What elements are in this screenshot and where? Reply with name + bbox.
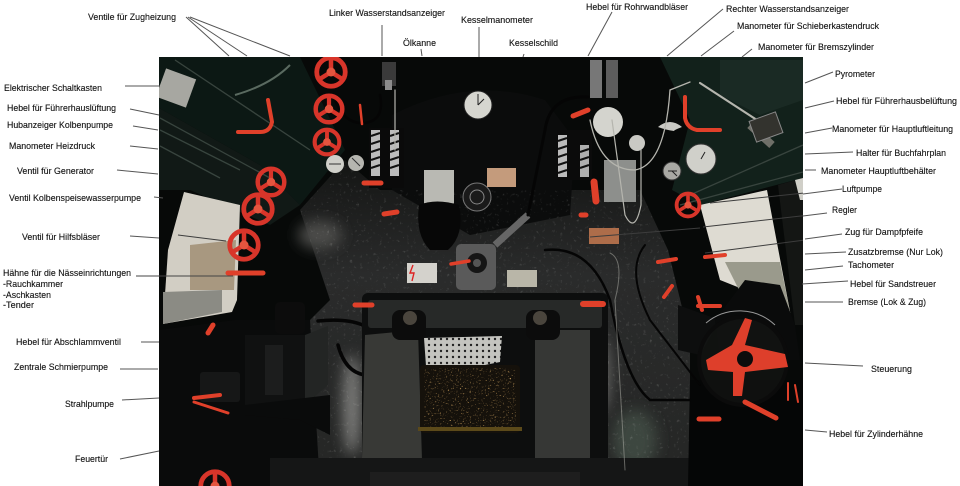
label: Tachometer	[805, 260, 895, 271]
label: Rechter Wasserstandsanzeiger	[667, 4, 850, 56]
label: Kesselschild: Kesselschild	[509, 38, 558, 49]
label: Hebel für Sandstreuer	[802, 279, 937, 290]
label: Ventil für Hilfsbläser	[22, 232, 159, 243]
label: Ventile für Zugheizung: Ventile für Zugheizung	[88, 12, 176, 23]
label: Hähne für die Nässeinrichtungen: -Rauchkammer	[3, 279, 64, 290]
lubricating pump box	[200, 330, 330, 435]
label: Bremse (Lok & Zug): Bremse (Lok & Zug)	[848, 297, 926, 308]
label: Hebel für Rohrwandbläser	[586, 2, 689, 56]
label: Ölkanne	[403, 38, 436, 56]
label: Rechter Wasserstandsanzeiger: Rechter Wasserstandsanzeiger	[726, 4, 850, 15]
label: Manometer Heizdruck	[9, 141, 158, 152]
label: Luftpumpe: Luftpumpe	[842, 184, 882, 195]
label: Steuerung: Steuerung	[871, 364, 912, 375]
label: Hebel für Abschlammventil: Hebel für Abschlammventil	[16, 337, 121, 348]
label: Hähne für die Nässeinrichtungen: Hähne für die Nässeinrichtungen	[3, 268, 131, 279]
right gauges	[593, 107, 716, 180]
left window	[163, 192, 240, 324]
line across photo	[178, 192, 803, 254]
label: Manometer für Bremszylinder	[742, 42, 875, 57]
label: Feuertür: Feuertür	[75, 454, 109, 465]
label: Ventil für Hilfsbläser: Ventil für Hilfsbläser	[22, 232, 101, 243]
firebox frame	[362, 293, 608, 471]
label: Strahlpumpe: Strahlpumpe	[65, 399, 114, 410]
label: Hebel für Zylinderhähne: Hebel für Zylinderhähne	[829, 429, 923, 440]
label: Hähne für die Nässeinrichtungen: -Tender	[3, 300, 35, 311]
reversing wheel (Steuerung)	[699, 311, 788, 418]
boiler top dome	[392, 190, 572, 235]
label: Feuertür	[75, 451, 159, 465]
right cab wall panel	[660, 57, 803, 205]
label: Halter für Buchfahrplan: Halter für Buchfahrplan	[856, 148, 946, 159]
label: Linker Wasserstandsanzeiger	[329, 8, 446, 56]
label: Hähne für die Nässeinrichtungen: -Aschkasten	[3, 290, 51, 301]
label: Hebel für Sandstreuer: Hebel für Sandstreuer	[850, 279, 937, 290]
generator box	[604, 160, 636, 202]
lower right machinery	[688, 386, 700, 486]
label: Pyrometer: Pyrometer	[835, 69, 876, 80]
label: Luftpumpe	[803, 184, 882, 195]
red hand wheels	[201, 58, 699, 486]
plates	[407, 168, 619, 287]
firebox door	[418, 336, 522, 433]
black and silver cables	[335, 82, 783, 470]
label: Regler: Regler	[832, 205, 858, 216]
label: Manometer für Bremszylinder: Manometer für Bremszylinder	[758, 42, 875, 53]
label: Ventil für Generator: Ventil für Generator	[17, 166, 95, 177]
label: Manometer Hauptluftbehälter: Manometer Hauptluftbehälter	[821, 166, 937, 177]
label: Manometer für Schieberkastendruck: Manometer für Schieberkastendruck	[737, 21, 879, 32]
label: Kesselmanometer: Kesselmanometer	[461, 15, 534, 26]
label: Linker Wasserstandsanzeiger: Linker Wasserstandsanzeiger	[329, 8, 446, 19]
label: Ventil für Generator	[17, 166, 158, 177]
label: Elektrischer Schaltkasten: Elektrischer Schaltkasten	[4, 83, 102, 94]
label: Strahlpumpe	[65, 398, 159, 410]
label: Regler	[803, 205, 858, 216]
label: Zusatzbremse (Nur Lok): Zusatzbremse (Nur Lok)	[848, 247, 943, 258]
label: Ölkanne: Ölkanne	[403, 38, 436, 49]
label: Zusatzbremse (Nur Lok)	[805, 247, 943, 258]
light reflections on plate	[298, 221, 657, 470]
left cab wall panel	[159, 57, 345, 205]
label: Manometer für Schieberkastendruck	[701, 21, 879, 56]
label: Steuerung	[805, 363, 912, 375]
label: Pyrometer	[805, 69, 876, 83]
label: Ventile für Zugheizung	[88, 12, 290, 56]
label: Hebel für Rohrwandbläser: Hebel für Rohrwandbläser	[586, 2, 689, 13]
lubrication hose	[316, 318, 362, 376]
boiler pressure gauge	[464, 91, 492, 119]
label: Manometer Heizdruck: Manometer Heizdruck	[9, 141, 95, 152]
label: Hebel für Führerhauslüftung: Hebel für Führerhauslüftung	[7, 103, 116, 114]
label: Zug für Dampfpfeife: Zug für Dampfpfeife	[845, 227, 923, 238]
photo: locomotive cab interior	[156, 57, 842, 486]
label: Tachometer: Tachometer	[848, 260, 895, 271]
right window	[700, 190, 792, 322]
label: Bremse (Lok & Zug)	[805, 297, 926, 308]
sight-glass protectors	[369, 128, 592, 188]
red levers	[194, 97, 798, 419]
oil can	[418, 170, 491, 250]
upper fittings	[156, 60, 618, 108]
label: Manometer für Hauptluftleitung: Manometer für Hauptluftleitung	[832, 124, 953, 135]
label: Kesselschild	[509, 38, 558, 57]
label: Zug für Dampfpfeife	[805, 227, 923, 239]
left gauges	[326, 155, 364, 173]
label: Zentrale Schmierpumpe: Zentrale Schmierpumpe	[14, 362, 108, 373]
label: Ventil Kolbenspeisewasserpumpe: Ventil Kolbenspeisewasserpumpe	[9, 193, 141, 204]
steel texture	[301, 165, 690, 458]
boiler backhead plate	[300, 160, 690, 458]
lower left dark machinery	[276, 320, 318, 458]
handrail diagonals	[160, 60, 803, 205]
centre regulator bearing	[456, 215, 528, 290]
label: Hubanzeiger Kolbenpumpe: Hubanzeiger Kolbenpumpe	[7, 120, 113, 131]
label: Hähne für die Nässeinrichtungen	[3, 268, 233, 311]
label: Kesselmanometer	[461, 15, 534, 57]
